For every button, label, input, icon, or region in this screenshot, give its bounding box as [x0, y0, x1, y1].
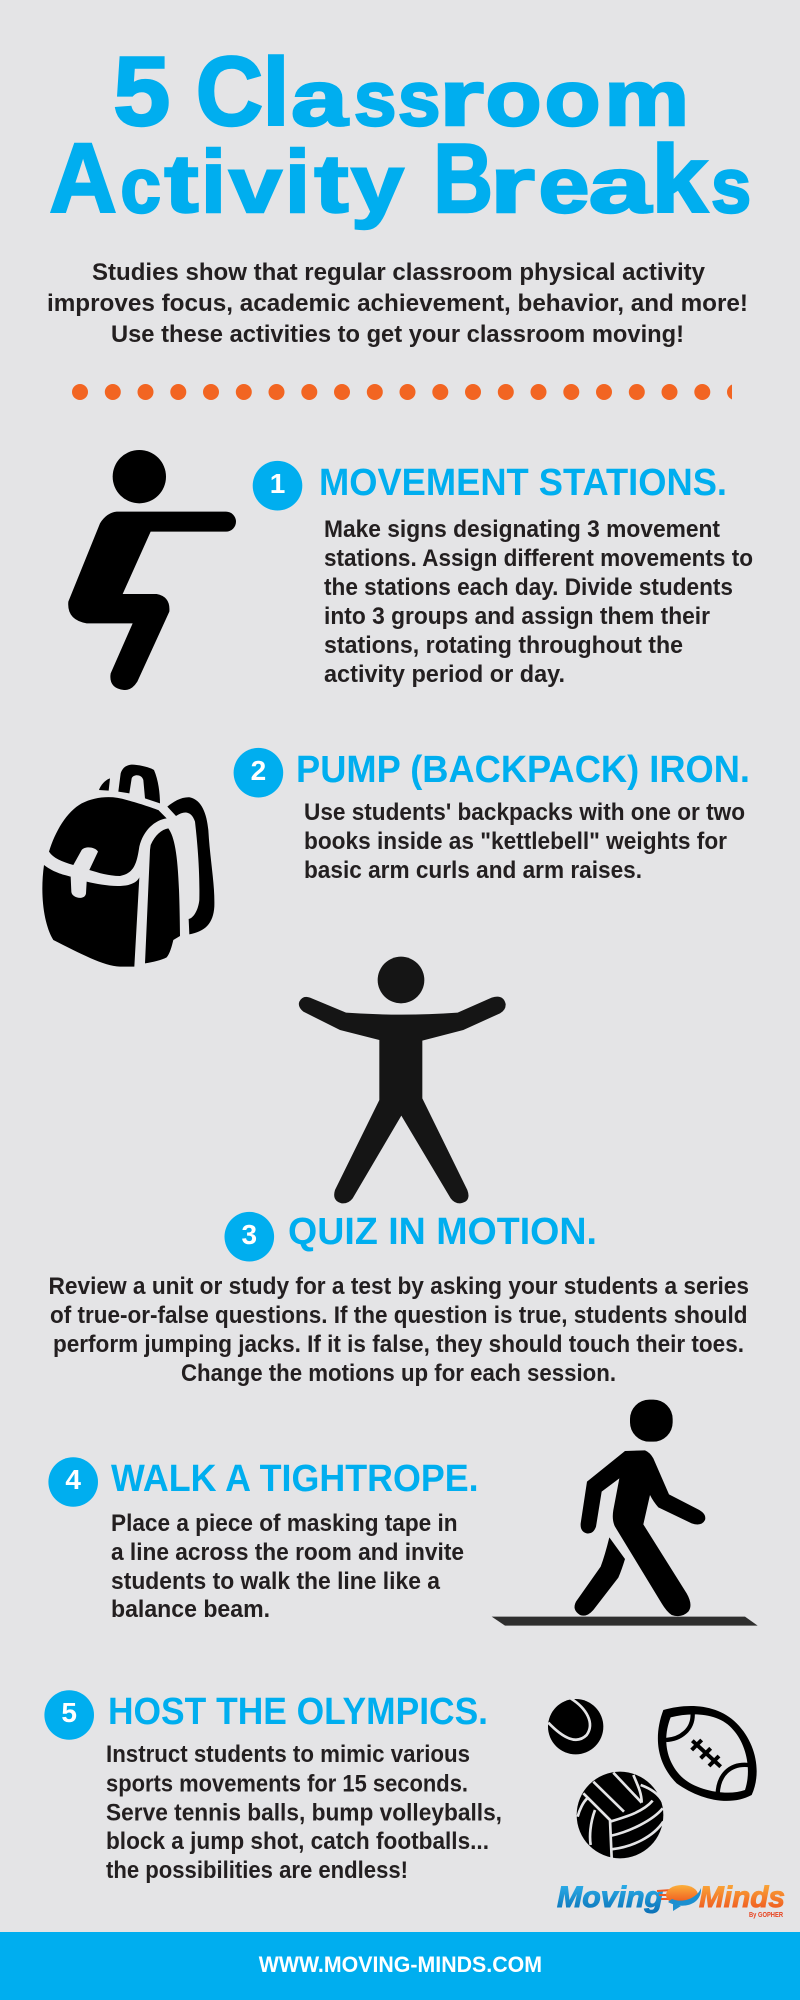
panel: activity 5 host the olympics	[44, 1690, 757, 1884]
title: t	[314, 139, 348, 230]
title: v	[229, 141, 283, 229]
body text 2	[304, 799, 745, 884]
title: B	[433, 123, 493, 233]
body text 5: sports movements for 15 seconds.	[106, 1770, 468, 1798]
title: c	[120, 141, 161, 229]
heading: movement stations: MOVEMENT STATIONS.	[319, 462, 727, 504]
body text 1: Make signs designating 3 movement	[324, 516, 720, 543]
number badge 4: 4	[65, 1464, 81, 1495]
logo: Moving Minds: Minds	[699, 1881, 785, 1914]
heading: pump backpack iron: PUMP (BACKPACK) IRON.	[296, 749, 750, 791]
title: y	[351, 139, 404, 230]
footer bar	[0, 1932, 800, 2000]
body text 3: Change the motions up for each session.	[181, 1360, 616, 1387]
icon: sports balls	[548, 1698, 757, 1858]
title: s	[398, 54, 440, 142]
intro text	[47, 259, 748, 348]
intro text: improves focus, academic achievement, behavior, and more!	[47, 290, 748, 317]
body text 1: stations. Assign different movements to	[324, 545, 753, 572]
number badge 2	[234, 748, 283, 798]
icon: brain with speed streaks	[657, 1885, 701, 1911]
intro text: Use these activities to get your classroom moving!	[111, 321, 684, 348]
panel: activity 1 movement stations	[68, 450, 753, 690]
number badge 4	[48, 1457, 98, 1507]
body text 4: Place a piece of masking tape in	[111, 1510, 458, 1537]
logo: Moving Minds: Moving	[557, 1881, 663, 1914]
footer url: WWW.MOVING-MINDS.COM	[259, 1952, 542, 1977]
body text 3: of true-or-false questions. If the question is true, students should	[50, 1302, 748, 1329]
panel: activity 3 quiz in motion	[48, 957, 749, 1387]
title: s	[711, 141, 751, 229]
body text 5: the possibilities are endless!	[106, 1857, 408, 1884]
number badge 3	[224, 1212, 274, 1261]
title: m	[604, 54, 689, 142]
body text 1: activity period or day.	[324, 661, 565, 688]
body text 5: Serve tennis balls, bump volleyballs,	[106, 1800, 502, 1827]
title	[49, 36, 751, 233]
heading: walk a tightrope: WALK A TIGHTROPE.	[111, 1458, 479, 1500]
icon: tennis ball	[548, 1698, 603, 1754]
title: o	[545, 54, 600, 142]
body text 2: Use students' backpacks with one or two	[304, 799, 745, 826]
body text 1: stations, rotating throughout the	[324, 632, 683, 659]
panel: activity 4 walk a tightrope	[48, 1400, 758, 1626]
title: i	[285, 132, 310, 231]
title: k	[651, 126, 708, 233]
title: r	[490, 141, 535, 229]
body text 4: a line across the room and invite	[111, 1539, 464, 1566]
number badge 5	[44, 1690, 94, 1740]
heading: host the olympics: HOST THE OLYMPICS.	[108, 1691, 488, 1733]
title: A	[49, 123, 117, 233]
title: e	[539, 141, 589, 229]
body text 5: Instruct students to mimic various	[106, 1741, 470, 1768]
intro text: Studies show that regular classroom physical activity	[92, 259, 706, 286]
body text 1	[324, 516, 753, 688]
body text 2: books inside as "kettlebell" weights for	[304, 828, 727, 855]
icon: volleyball	[577, 1772, 663, 1858]
logo: Moving Minds	[557, 1881, 785, 1919]
icon: football	[658, 1706, 757, 1801]
body text 4: balance beam.	[111, 1596, 270, 1623]
title: 5	[113, 36, 170, 146]
body text 3	[48, 1273, 749, 1387]
panel: activity 2 pump backpack iron	[42, 748, 750, 967]
icon: backpack	[42, 765, 214, 967]
body text 3: Review a unit or study for a test by asking your students a series	[48, 1273, 749, 1300]
icon: squatting figure	[68, 450, 236, 690]
body text 5	[106, 1741, 502, 1884]
number badge 5: 5	[61, 1697, 77, 1728]
number badge 3: 3	[242, 1219, 257, 1250]
body text 4	[111, 1510, 464, 1623]
number badge 1: 1	[270, 468, 285, 499]
body text 1: the stations each day. Divide students	[324, 574, 733, 601]
body text 1: into 3 groups and assign them their	[324, 603, 710, 630]
number badge 2: 2	[251, 755, 266, 786]
body text 4: students to walk the line like a	[111, 1568, 441, 1595]
title: a	[589, 141, 652, 229]
body text 5: block a jump shot, catch footballs...	[106, 1828, 489, 1855]
title: r	[439, 54, 484, 142]
title: i	[201, 132, 226, 231]
title: l	[262, 39, 290, 146]
body text 3: perform jumping jacks. If it is false, they should touch their toes.	[53, 1331, 744, 1358]
number badge 1	[253, 461, 302, 511]
logo: Moving Minds: By GOPHER	[749, 1912, 783, 1919]
dotted divider	[72, 384, 743, 400]
icon: walking figure on tape	[492, 1400, 758, 1626]
heading: quiz in motion: QUIZ IN MOTION.	[288, 1211, 597, 1253]
body text 2: basic arm curls and arm raises.	[304, 857, 642, 884]
title: C	[196, 36, 263, 146]
title: o	[486, 54, 542, 142]
title: s	[354, 54, 396, 142]
title: t	[164, 139, 198, 230]
title: a	[291, 54, 348, 142]
icon: jumping jack figure	[299, 957, 506, 1203]
